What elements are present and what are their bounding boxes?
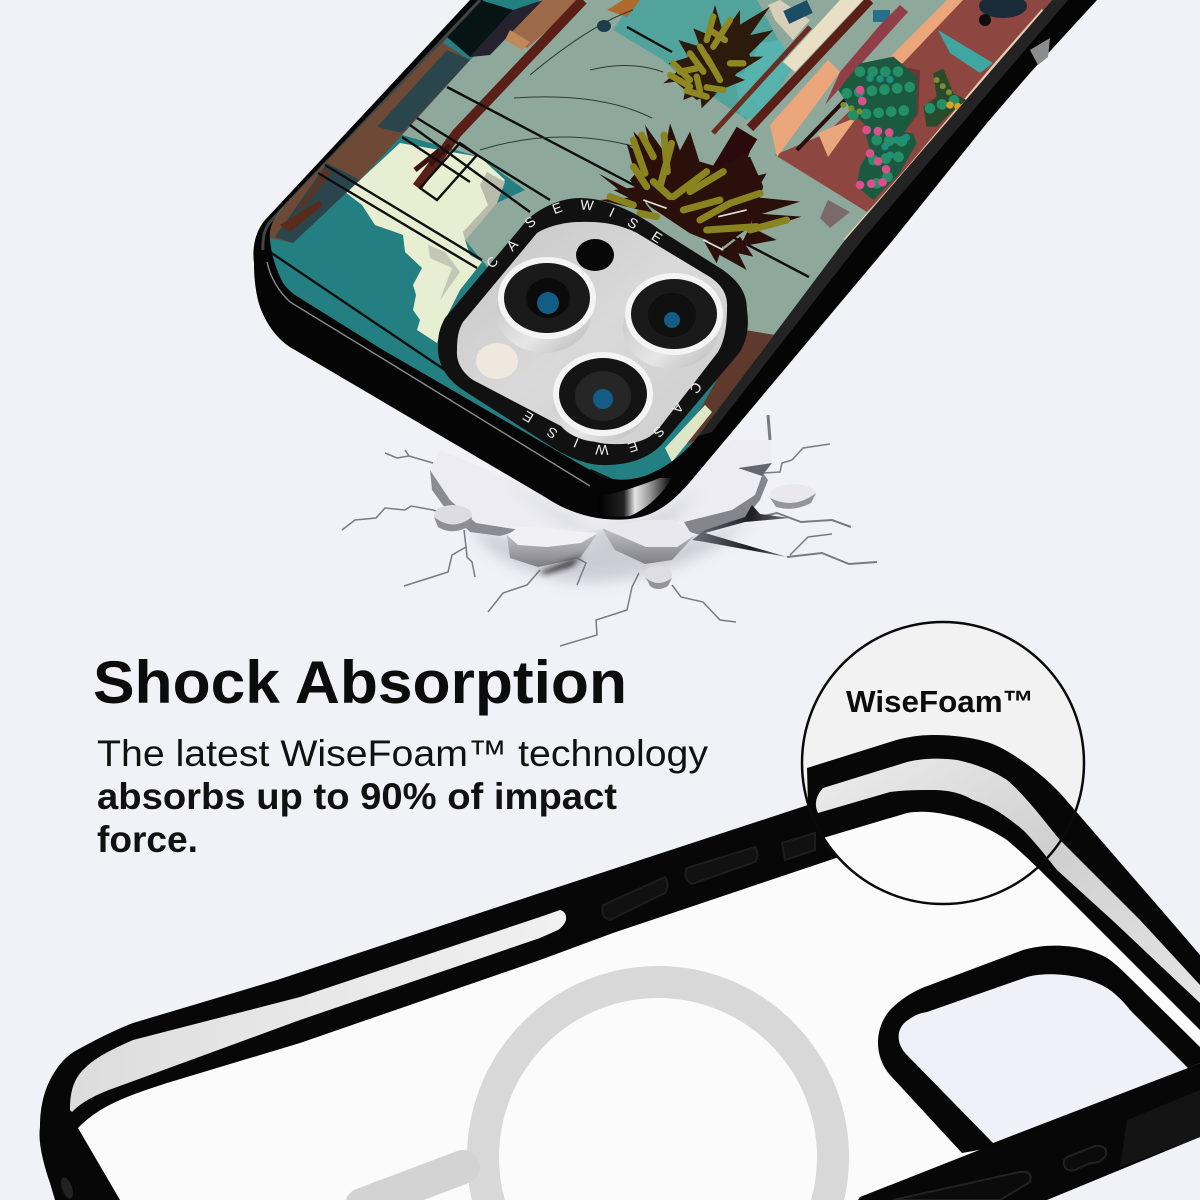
top right clear strip — [816, 759, 1200, 1003]
description text: The latest WiseFoam™ technology — [97, 733, 709, 774]
cloud grey steps — [463, 172, 505, 240]
main utility pole — [417, 0, 583, 187]
brand text on bump: C — [483, 253, 501, 271]
black window — [447, 0, 513, 57]
palm tree upper — [663, 5, 773, 108]
peach roof — [770, 60, 840, 157]
raised plate — [430, 440, 772, 530]
brand text on bump: E — [520, 408, 536, 426]
teal dish — [938, 30, 993, 73]
description text: absorbs up to 90% of impact — [97, 776, 617, 817]
sage sky — [402, 0, 1070, 370]
brand text on bump: W — [580, 196, 595, 214]
wires — [270, 27, 809, 480]
brand text on bump: E — [626, 438, 640, 456]
magnet ring — [483, 982, 833, 1200]
palm tree lower — [598, 123, 802, 270]
magnifier circle background — [802, 622, 1084, 904]
phone with illustrated case — [250, 0, 1100, 520]
flash — [476, 343, 518, 379]
teal water top — [613, 0, 793, 120]
lower right art — [687, 330, 774, 444]
small rock pieces — [434, 484, 816, 589]
orange box and lamp — [607, 0, 640, 17]
side button gloss — [1030, 38, 1050, 65]
brand text on bump: A — [668, 399, 687, 417]
bottom-edge sheen — [1120, 1090, 1200, 1167]
brand text on bump — [483, 196, 705, 458]
lens right — [623, 273, 723, 369]
trunk — [713, 126, 758, 167]
rock chunk left — [507, 527, 598, 574]
callout label: WiseFoam™ — [846, 684, 1034, 719]
crater wall left — [430, 470, 520, 536]
right rim — [698, 0, 1068, 436]
lens top — [496, 257, 596, 353]
brand text on bump: W — [594, 442, 609, 458]
screen edge highlight — [267, 262, 590, 486]
grey left rim — [263, 0, 480, 250]
crater soft shadow — [470, 505, 770, 582]
lens bottom — [553, 352, 653, 442]
corner hole — [61, 1178, 73, 1198]
fine wires — [480, 10, 663, 150]
camera plate — [457, 222, 727, 444]
brand text on bump: E — [550, 199, 564, 217]
bump frame — [438, 198, 748, 465]
clear back panel — [78, 812, 1200, 1200]
corner highlight — [598, 478, 672, 517]
teal base — [270, 0, 1052, 480]
flowers — [838, 57, 967, 200]
salmon wall — [775, 0, 1060, 212]
frame outer — [39, 735, 1200, 1200]
beam — [750, 0, 870, 128]
brand text on bump: S — [625, 214, 641, 232]
wedge at right — [738, 463, 772, 476]
navy lamp — [979, 0, 1027, 18]
brown house — [512, 0, 576, 48]
brown left strip — [270, 0, 483, 243]
magnet alignment pill — [362, 1167, 463, 1200]
illustrated artwork — [270, 0, 1052, 480]
title: Shock Absorption — [93, 649, 627, 716]
phone cast shadow — [500, 480, 700, 534]
brand text on bump: E — [649, 228, 665, 246]
brand text on bump: A — [503, 236, 521, 254]
left clear strip — [70, 910, 566, 1112]
magnifier circle outline — [802, 622, 1084, 904]
crack lines — [342, 415, 877, 646]
steps — [820, 200, 850, 228]
brand text on bump: S — [650, 423, 668, 441]
description text: force. — [97, 819, 198, 860]
rock chunk right — [602, 520, 695, 564]
brand text on bump: I — [571, 435, 581, 451]
brand text on bump: I — [607, 204, 617, 220]
cracked ground impact — [342, 415, 877, 646]
case body — [253, 0, 1097, 520]
brand text on bump: S — [544, 424, 560, 442]
brand text on bump: S — [521, 213, 539, 231]
camera cutout frame — [878, 946, 1200, 1153]
side buttons — [602, 833, 815, 920]
description text — [97, 733, 709, 860]
microphone hole — [576, 239, 614, 271]
bottom-edge port and buttons — [893, 1146, 1106, 1200]
brand text on bump: C — [687, 379, 705, 397]
crater dark gap — [692, 505, 790, 557]
cream cloud — [345, 143, 505, 343]
crater wall right — [684, 473, 768, 535]
clear case with black frame — [39, 735, 1200, 1200]
camera cutout — [899, 974, 1188, 1143]
upper right cream building — [744, 40, 790, 74]
camera bump — [438, 196, 748, 465]
sand trim — [845, 10, 1043, 240]
